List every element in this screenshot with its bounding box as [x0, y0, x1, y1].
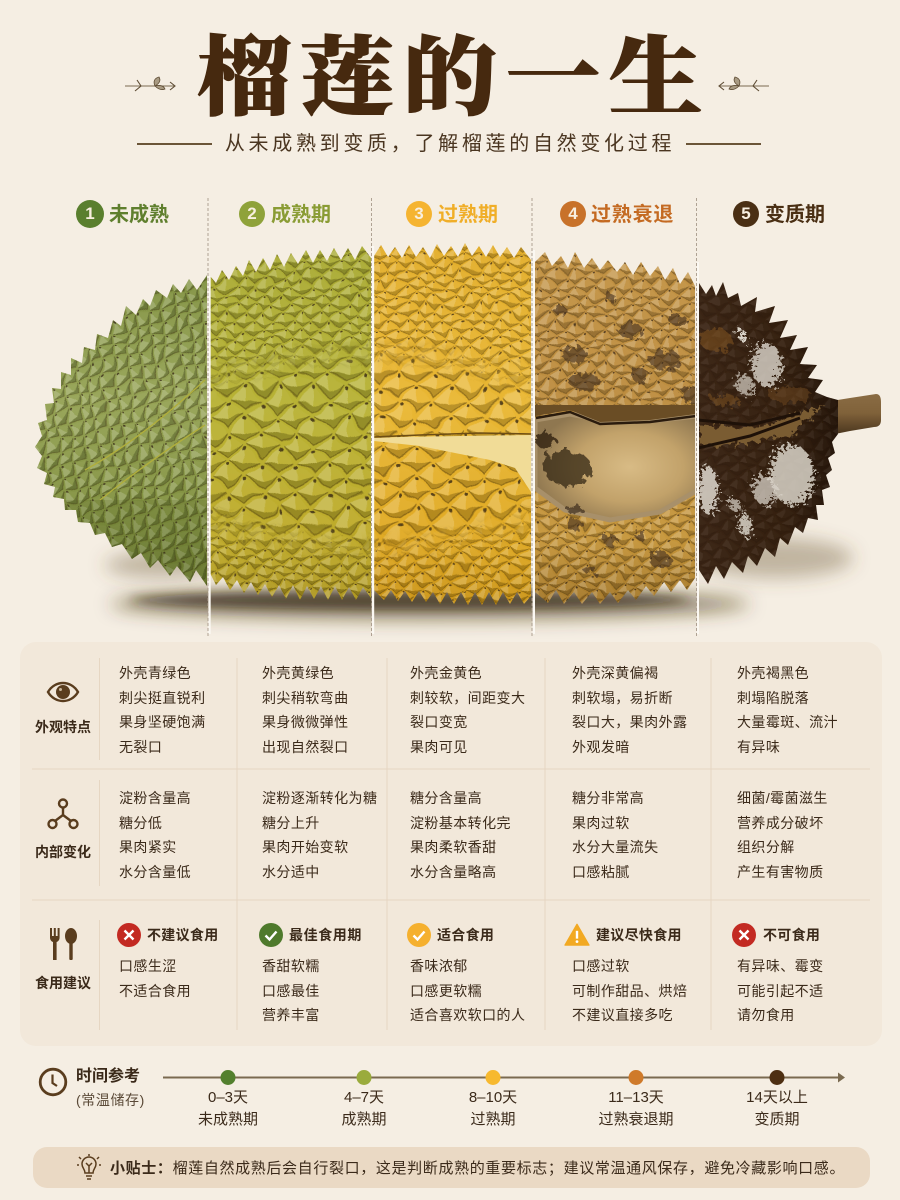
timeline stop 1 — [173, 1087, 283, 1131]
text — [737, 958, 824, 1023]
icon: eye — [46, 682, 80, 702]
internal column 1: 淀粉含量高 — [119, 790, 191, 806]
text: 口感更软糯 — [410, 983, 482, 999]
row header: eating advice — [35, 928, 91, 991]
internal column 4: 果肉过软 — [572, 815, 630, 831]
ornament right — [718, 76, 769, 92]
appearance column 4: 外观发暗 — [572, 739, 630, 755]
icon: cross — [732, 923, 756, 947]
timeline stop 2 — [309, 1087, 419, 1131]
icon: fork and spoon — [50, 928, 77, 960]
timeline stop 2: 成熟期 — [341, 1111, 386, 1128]
internal column 4: 口感粘腻 — [572, 864, 630, 880]
timeline stop 3: 8–10天 — [469, 1089, 517, 1106]
text: 请勿食用 — [737, 1007, 795, 1023]
internal column 3: 淀粉基本转化完 — [410, 815, 511, 831]
stage 4 label — [560, 201, 674, 227]
durian segment 1: unripe green — [35, 275, 207, 586]
text: 有异味、霉变 — [737, 958, 824, 974]
stage 3 label: 3 — [414, 204, 424, 223]
text — [119, 958, 191, 999]
appearance column 3: 外壳金黄色 — [410, 665, 482, 681]
appearance column 1 — [119, 665, 206, 755]
appearance column 4: 刺软塌，易折断 — [572, 690, 673, 706]
appearance column 5: 刺塌陷脱落 — [737, 690, 809, 706]
internal column 1 — [119, 790, 191, 880]
appearance column 4: 裂口大，果肉外露 — [572, 714, 687, 730]
icon: network — [47, 798, 79, 830]
internal column 5 — [737, 790, 828, 880]
advice column 2 — [259, 923, 362, 1023]
text: 不建议直接多吃 — [572, 1007, 673, 1023]
durian segment 4: declining with exposed flesh — [535, 252, 695, 604]
internal column 3: 果肉柔软香甜 — [410, 839, 497, 855]
stalk — [825, 394, 881, 436]
appearance column 2 — [262, 665, 349, 755]
white mold patches — [698, 329, 814, 537]
text: 香甜软糯 — [262, 958, 320, 974]
appearance column 2: 刺尖稍软弯曲 — [262, 690, 349, 706]
timeline stop 4: 11–13天 — [608, 1089, 664, 1106]
text: 可能引起不适 — [737, 983, 824, 999]
durian segment 3: golden overripe with crack — [374, 243, 531, 605]
internal column 1: 糖分低 — [119, 815, 162, 831]
icon: check green — [259, 923, 283, 947]
internal column 1: 水分含量低 — [119, 864, 191, 880]
dark bruises — [554, 294, 698, 575]
stage 1 label: 1 — [85, 204, 95, 223]
text — [572, 958, 687, 1023]
label: appearance: 外观特点 — [35, 719, 91, 735]
timeline note: (常温储存) — [76, 1092, 145, 1108]
durian segment 2: ripe yellow-green — [210, 246, 371, 600]
divider lines between stages — [208, 198, 699, 636]
timeline heading: 时间参考 — [76, 1068, 140, 1085]
exposed flesh — [535, 414, 698, 520]
appearance column 3: 果肉可见 — [410, 739, 468, 755]
appearance column 5: 外壳褐黑色 — [737, 665, 809, 681]
appearance column 5: 有异味 — [737, 739, 780, 755]
heading: 建议尽快食用 — [596, 927, 682, 943]
internal column 3 — [410, 790, 511, 880]
title: 榴莲的一生 — [197, 31, 712, 127]
timeline stop 4 — [581, 1087, 691, 1131]
stage 5 label: 5 — [741, 204, 751, 223]
stage 2 label: 成熟期 — [271, 204, 331, 226]
heading: 不建议食用 — [147, 927, 218, 943]
advice column 5 — [732, 923, 824, 1023]
stage 1 label — [76, 200, 169, 228]
internal column 2: 果肉开始变软 — [262, 839, 349, 855]
internal column 4: 水分大量流失 — [572, 839, 659, 855]
stage 3 label — [406, 201, 498, 227]
label: internal change: 内部变化 — [35, 844, 91, 860]
full page artwork layer: durian photo illustration — [35, 198, 881, 636]
internal column 3: 糖分含量高 — [410, 790, 482, 806]
tip text: 小贴士：榴莲自然成熟后会自行裂口，这是判断成熟的重要标志；建议常温通风保存，避免冷藏影响口感。 — [110, 1160, 845, 1177]
heading: 适合食用 — [437, 927, 494, 943]
text: 香味浓郁 — [410, 958, 468, 974]
label: eating advice: 食用建议 — [35, 975, 91, 991]
appearance column 5 — [737, 665, 838, 755]
internal column 5: 细菌/霉菌滋生 — [737, 790, 828, 806]
advice column 4 — [564, 924, 687, 1023]
timeline stop 5: 14天以上 — [746, 1089, 808, 1106]
timeline stop 2: 4–7天 — [344, 1089, 384, 1106]
stage 5 label: 变质期 — [765, 204, 825, 226]
internal column 2: 水分适中 — [262, 864, 320, 880]
stage 2 label — [239, 201, 331, 227]
ground shadow — [105, 538, 853, 619]
internal column 3: 水分含量略高 — [410, 864, 497, 880]
appearance column 4: 外壳深黄偏褐 — [572, 665, 659, 681]
internal column 4 — [572, 790, 659, 880]
appearance column 2: 果身微微弹性 — [262, 714, 349, 730]
appearance column 4 — [572, 665, 687, 755]
stage 1 label: 未成熟 — [109, 204, 169, 226]
text: 口感生涩 — [119, 958, 177, 974]
appearance column 1: 果身坚硬饱满 — [119, 714, 206, 730]
icon: clock — [38, 1068, 68, 1096]
text — [262, 958, 320, 1023]
durian segment 5: spoiled black with mold and stalk — [699, 282, 881, 584]
appearance column 1: 刺尖挺直锐利 — [119, 690, 206, 706]
crack — [374, 435, 531, 492]
appearance column 3 — [410, 665, 525, 755]
crack line — [698, 413, 800, 448]
appearance column 2: 出现自然裂口 — [262, 739, 349, 755]
timeline stop 1: 0–3天 — [208, 1089, 248, 1106]
timeline stop 4: 过熟衰退期 — [598, 1111, 674, 1128]
icon: cross — [117, 923, 141, 947]
text: 可制作甜品、烘焙 — [572, 983, 687, 999]
ornament left — [125, 76, 176, 92]
appearance column 3: 刺较软，间距变大 — [410, 690, 525, 706]
icon: check yellow — [407, 923, 431, 947]
stage 4 label: 过熟衰退 — [591, 204, 674, 226]
internal column 4: 糖分非常高 — [572, 790, 644, 806]
appearance column 2: 外壳黄绿色 — [262, 665, 334, 681]
internal column 2: 淀粉逐渐转化为糖 — [262, 790, 377, 806]
subtitle rule right — [686, 143, 761, 144]
appearance column 5: 大量霉斑、流汁 — [737, 714, 838, 730]
stage 2 label: 2 — [247, 204, 257, 223]
row header: appearance — [35, 682, 91, 735]
icon: light bulb — [76, 1153, 102, 1183]
subtitle rule left — [137, 143, 212, 144]
timeline stop 5: 变质期 — [754, 1111, 800, 1128]
timeline — [38, 1067, 845, 1128]
text: 不适合食用 — [119, 983, 191, 999]
stage 5 label — [733, 201, 825, 227]
row header: internal change — [35, 798, 91, 860]
heading: 最佳食用期 — [289, 927, 362, 943]
timeline axis — [0, 1050, 900, 1100]
timeline stop 1: 未成熟期 — [198, 1111, 258, 1128]
appearance column 1: 无裂口 — [119, 739, 162, 755]
appearance column 1: 外壳青绿色 — [119, 665, 191, 681]
subtitle: 从未成熟到变质，了解榴莲的自然变化过程 — [225, 133, 675, 155]
text: 营养丰富 — [262, 1007, 320, 1023]
tip bar — [33, 1147, 870, 1188]
timeline stop 5 — [722, 1087, 832, 1131]
advice column 1 — [117, 923, 218, 999]
text: 口感最佳 — [262, 983, 320, 999]
timeline stop 3 — [438, 1087, 548, 1131]
internal column 5: 营养成分破坏 — [737, 815, 824, 831]
timeline stop 3: 过熟期 — [470, 1111, 516, 1128]
text: 适合喜欢软口的人 — [410, 1007, 525, 1023]
internal column 2: 糖分上升 — [262, 815, 320, 831]
text — [410, 958, 525, 1023]
text: 口感过软 — [572, 958, 630, 974]
stage 4 label: 4 — [568, 204, 578, 223]
icon: warning — [564, 924, 590, 946]
internal column 2 — [262, 790, 377, 880]
stage 3 label: 过熟期 — [438, 204, 498, 226]
appearance column 3: 裂口变宽 — [410, 714, 468, 730]
internal column 5: 产生有害物质 — [737, 864, 824, 880]
heading: 不可食用 — [763, 927, 820, 943]
advice column 3 — [407, 923, 525, 1023]
internal column 1: 果肉紧实 — [119, 839, 177, 855]
internal column 5: 组织分解 — [737, 839, 795, 855]
